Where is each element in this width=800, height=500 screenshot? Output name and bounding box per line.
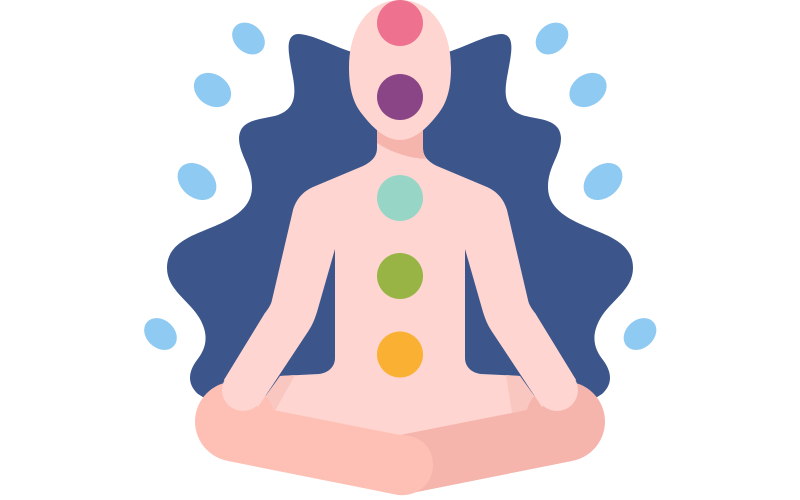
left hand and forearm [222,313,309,411]
torso and arms [224,125,576,440]
water droplets right [529,16,663,356]
right hand and forearm [491,313,578,411]
chakra: solar plexus [377,253,423,299]
right leg [395,382,605,493]
water droplets left [138,16,271,356]
left leg [195,382,433,495]
chakra: sacral [377,332,423,378]
inner thigh shadows [250,375,295,411]
aura: dark blue wavy background [167,34,633,420]
chakra: heart [377,175,423,221]
neck shadow [377,125,426,159]
chakra: crown [377,0,423,46]
chakra: third eye [377,74,423,120]
head [349,0,451,140]
seated figure [195,0,605,495]
